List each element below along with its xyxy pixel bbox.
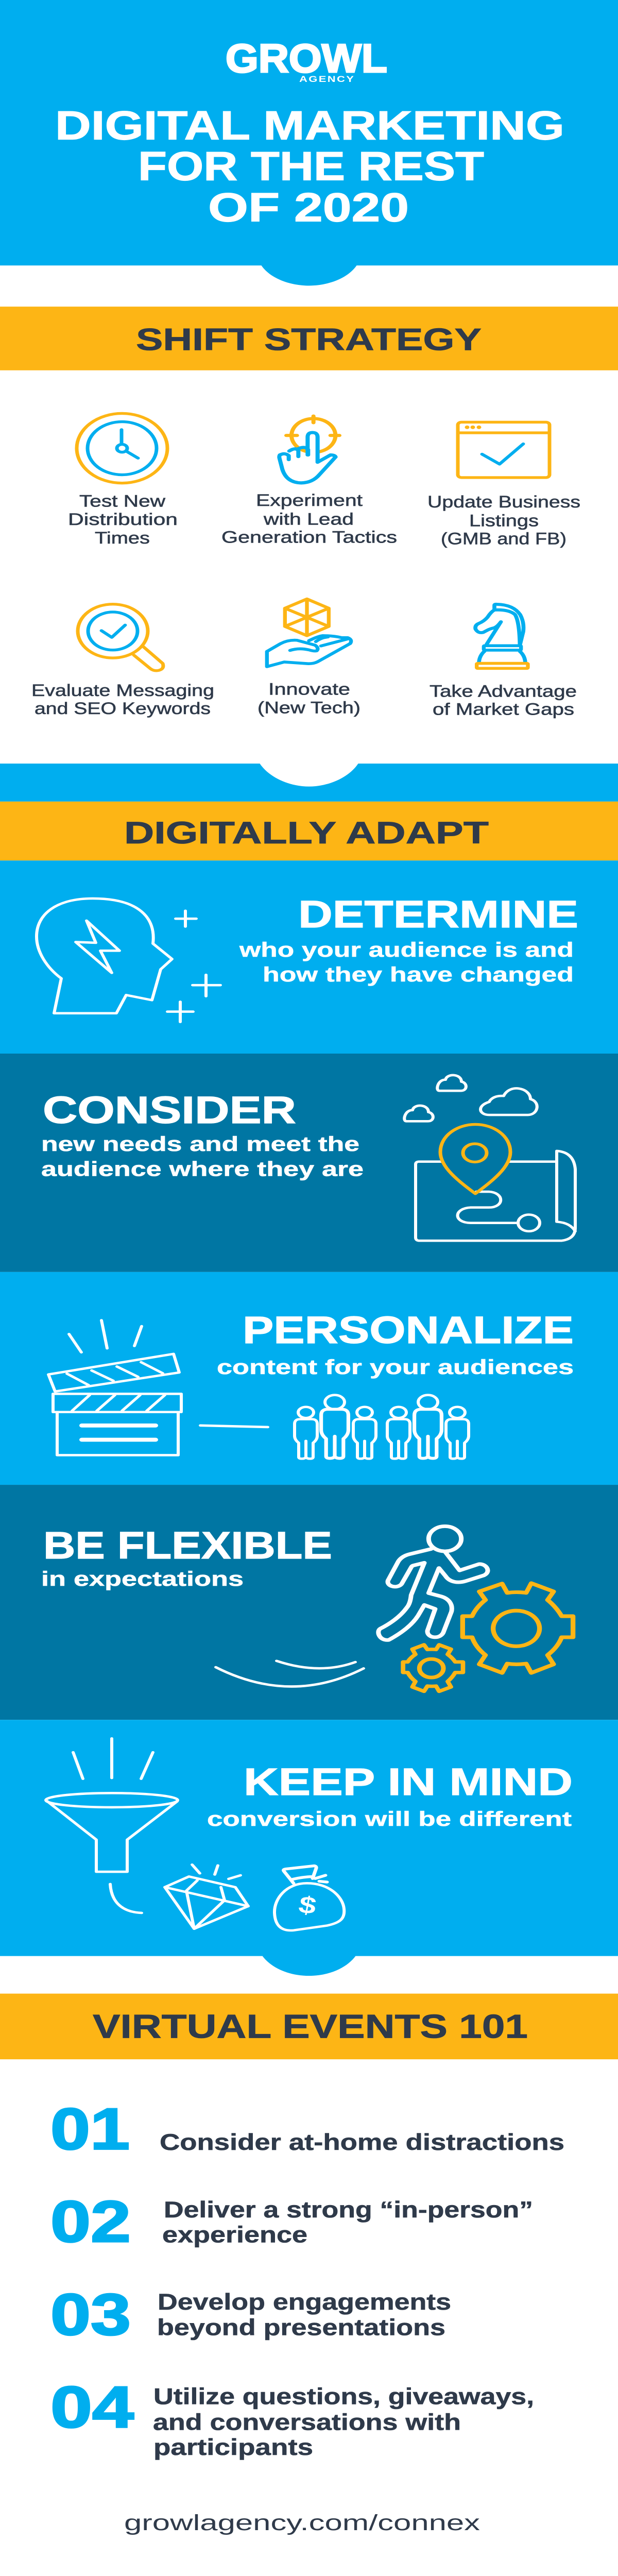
- icon: money bag: [274, 1866, 344, 1930]
- text: experiment with lead generation tactics: Generation Tactics: [221, 528, 397, 546]
- text: test new distribution times: Test New: [79, 492, 166, 511]
- heading: digitally adapt: [0, 802, 618, 860]
- item 02: 02: [50, 2189, 131, 2254]
- text: experiment with lead generation tactics: Experiment: [256, 491, 363, 510]
- icon: clock: [77, 413, 167, 483]
- text: new needs: audience where they are: [41, 1157, 364, 1180]
- panel: keep in mind: [0, 1720, 618, 1976]
- heading: shift strategy: [0, 307, 618, 370]
- text: experiment with lead generation tactics: [221, 491, 397, 546]
- icon: audience people: [295, 1395, 469, 1459]
- text: test new distribution times: Distribution: [68, 510, 178, 529]
- icon: running figure: [379, 1526, 488, 1640]
- item 01: 01: [50, 2096, 130, 2162]
- text: who your audience is: who your audience is and: [239, 938, 574, 961]
- item 04: [50, 2375, 534, 2460]
- text: update business listings: Update Business: [427, 493, 580, 511]
- text: take advantage of market gaps: [430, 682, 577, 719]
- text: take advantage of market gaps: Take Advantage: [430, 682, 577, 700]
- text: test new distribution times: Times: [95, 529, 150, 547]
- icon: gears: [403, 1583, 573, 1691]
- title: [55, 103, 564, 230]
- heading: virtual events 101: [0, 1994, 618, 2059]
- item 03: [50, 2282, 451, 2347]
- panel: digitally adapt background band: [0, 763, 618, 802]
- item 04: Utilize questions, giveaways,: [153, 2383, 534, 2409]
- text: innovate new tech: (New Tech): [258, 698, 360, 717]
- text: new needs: new needs and meet the: [41, 1132, 359, 1156]
- item 02: [50, 2189, 533, 2254]
- decoration: motion arcs: [216, 1661, 364, 1687]
- icon: head with lightning bolt: [37, 899, 220, 1022]
- text: take advantage of market gaps: of Market Gaps: [433, 700, 574, 719]
- icon: location pin: [440, 1124, 510, 1194]
- panel: determine: [0, 860, 618, 1054]
- panel: virtual events list: [50, 2096, 564, 2460]
- text: update business listings: (GMB and FB): [441, 529, 566, 548]
- icon: clouds: [404, 1075, 537, 1121]
- logo: Growl Agency: GROWL: [226, 36, 387, 81]
- item 01: [50, 2096, 564, 2162]
- icon: funnel: [46, 1738, 178, 1913]
- item 03: beyond presentations: [157, 2314, 445, 2340]
- logo: Growl Agency: AGENCY: [299, 74, 354, 84]
- item 04: participants: [153, 2434, 313, 2460]
- icon: hand with cube: [267, 599, 351, 667]
- item 03: 03: [50, 2282, 131, 2347]
- title: DIGITAL MARKETING: [55, 103, 564, 148]
- text: test new distribution times: [68, 492, 178, 547]
- icon: money bag: $: [297, 1892, 318, 1920]
- footer url: growlagency.com/connex: [124, 2510, 480, 2535]
- heading: consider: CONSIDER: [43, 1089, 296, 1132]
- panel: shift strategy items: [31, 413, 580, 719]
- text: content for your audiences: content for your audiences: [217, 1355, 574, 1379]
- heading: be flexible: BE FLEXIBLE: [43, 1524, 332, 1567]
- item 02: Deliver a strong “in-person”: [164, 2197, 533, 2223]
- panel: hero header: [0, 0, 618, 285]
- text: update business listings: [427, 493, 580, 548]
- text: innovate new tech: [258, 680, 360, 717]
- item 04: 04: [50, 2375, 134, 2439]
- text: new needs: [41, 1132, 364, 1180]
- text: who your audience is: [239, 938, 574, 986]
- icon: browser window with check: [458, 422, 550, 478]
- text: in expectations: in expectations: [41, 1567, 244, 1590]
- icon: hand and target: [279, 416, 339, 483]
- text: update business listings: Listings: [469, 511, 539, 530]
- title: FOR THE REST: [138, 144, 484, 189]
- title: OF 2020: [208, 185, 409, 230]
- icon: clapperboard: [48, 1320, 268, 1455]
- heading: keep in mind: KEEP IN MIND: [244, 1761, 573, 1803]
- icon: map with route: [416, 1151, 575, 1241]
- item 01: Consider at-home distractions: [160, 2129, 564, 2155]
- text: experiment with lead generation tactics: with Lead: [263, 510, 354, 528]
- icon: chess knight: [475, 604, 528, 668]
- item 03: Develop engagements: [158, 2289, 451, 2315]
- heading: determine: DETERMINE: [298, 893, 578, 936]
- text: evaluate messaging and seo keywords: [31, 681, 214, 718]
- text: evaluate messaging and seo keywords: Evaluate Messaging: [31, 681, 214, 700]
- text: evaluate messaging and seo keywords: and SEO Keywords: [35, 699, 211, 718]
- heading: shift strategy: SHIFT STRATEGY: [136, 322, 482, 357]
- text: innovate new tech: Innovate: [268, 680, 350, 698]
- panel: personalize: [0, 1272, 618, 1485]
- icon: magnifier with check: [78, 604, 163, 671]
- panel: be flexible: [0, 1485, 618, 1720]
- heading: virtual events 101: VIRTUAL EVENTS 101: [93, 2008, 528, 2045]
- text: conversion will be different: conversion will be different: [207, 1807, 572, 1831]
- text: who your audience is: how they have changed: [263, 963, 574, 986]
- icon: diamond: [165, 1865, 248, 1929]
- item 04: and conversations with: [153, 2409, 461, 2435]
- heading: digitally adapt: DIGITALLY ADAPT: [124, 816, 489, 850]
- heading: personalize: PERSONALIZE: [243, 1309, 574, 1351]
- item 02: experience: [162, 2222, 307, 2247]
- panel: consider: [0, 1054, 618, 1272]
